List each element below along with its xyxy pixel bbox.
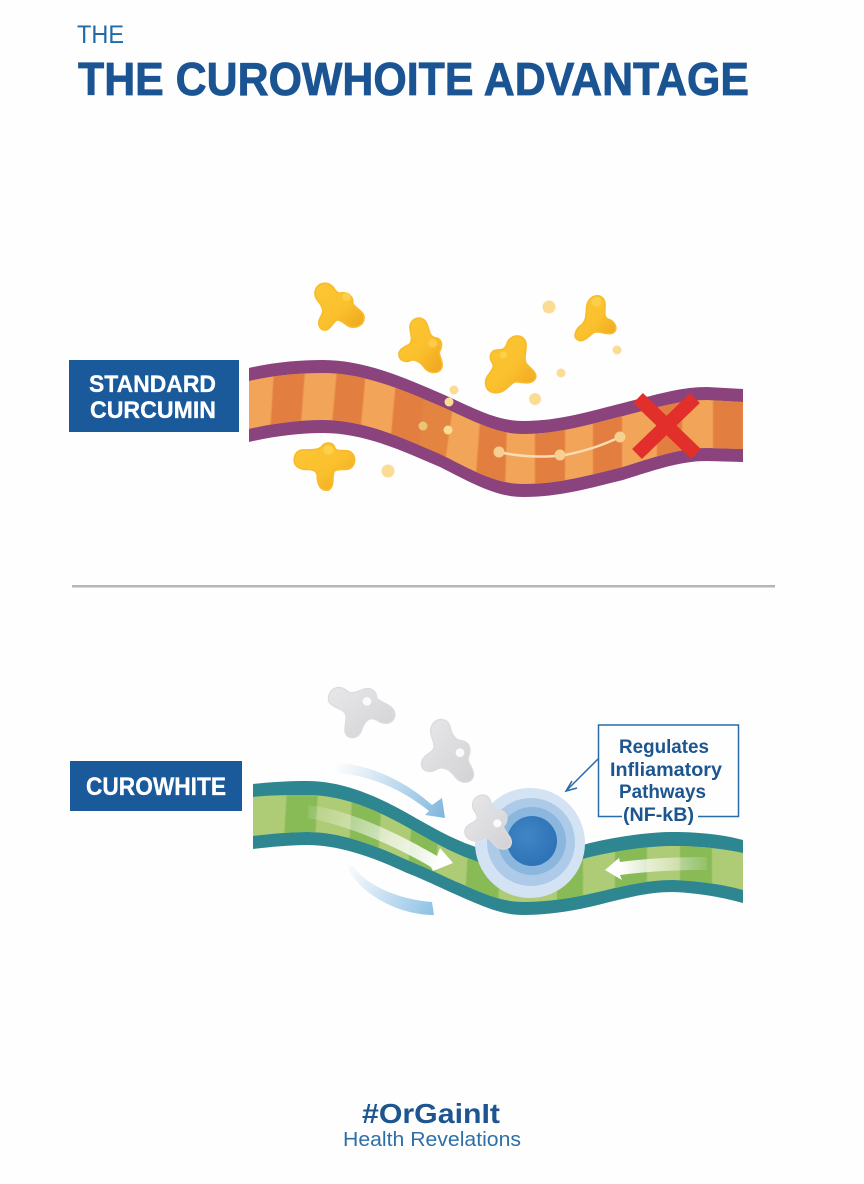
callout: regulates inflammatory pathways <box>598 725 738 826</box>
divider <box>72 585 775 588</box>
icon: red cross <box>637 398 696 454</box>
arrow: white flow right <box>605 857 707 880</box>
curcumin molecules: yellow <box>294 283 616 490</box>
target receptor rings <box>475 788 585 898</box>
arrow: callout pointer <box>566 759 598 791</box>
blood vessel: orange and purple <box>249 360 743 500</box>
arrow: light blue flow upper <box>337 763 445 818</box>
footer: #OrGainIt <box>362 1098 500 1129</box>
callout: regulates inflammatory pathways: Infliamatory <box>610 760 722 781</box>
callout: regulates inflammatory pathways: Regulates <box>619 737 709 758</box>
footer <box>343 1098 521 1151</box>
label: curowhite <box>70 761 242 811</box>
label: curowhite: CUROWHITE <box>86 773 226 801</box>
particle path inside vessel <box>494 432 626 460</box>
curowhite molecules: white <box>328 688 511 849</box>
callout: regulates inflammatory pathways: (NF-kB) <box>623 805 694 826</box>
callout: regulates inflammatory pathways: Pathways <box>619 782 706 803</box>
small heading: THE <box>77 21 124 49</box>
arrow: light blue flow lower <box>347 865 434 915</box>
arrow: white flow left <box>308 805 453 871</box>
blood vessel: green and teal <box>253 780 743 915</box>
absorption particles <box>382 300 622 478</box>
panel: standard curcumin <box>69 283 743 500</box>
label: standard curcumin <box>69 360 239 432</box>
panel: curowhite <box>70 688 743 915</box>
label: standard curcumin: STANDARD <box>89 371 216 398</box>
label: standard curcumin: CURCUMIN <box>90 397 216 424</box>
footer: Health Revelations <box>343 1129 521 1151</box>
title: THE CUROWHOITE ADVANTAGE <box>78 53 749 105</box>
